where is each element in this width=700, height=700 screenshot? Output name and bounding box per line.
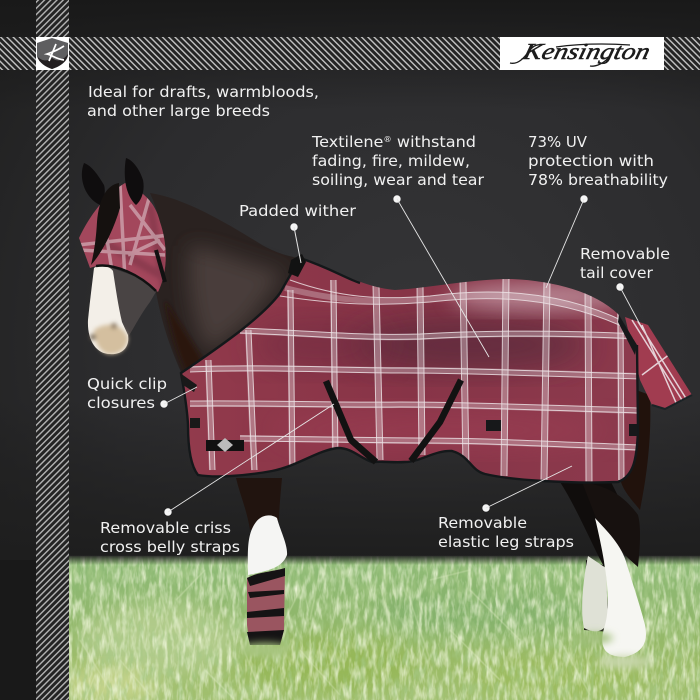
mane forelock — [91, 183, 120, 265]
callout: padded wither — [239, 202, 357, 263]
logo badge: K shield — [36, 37, 69, 70]
callout: leg straps — [438, 466, 574, 551]
callout: belly straps: cross belly straps — [100, 538, 240, 556]
callout: Textilene: ® — [383, 135, 392, 144]
callout: leg straps: Removable — [438, 514, 527, 532]
quick clips — [180, 373, 200, 428]
callout: belly straps — [100, 404, 334, 556]
callout: tail cover: Removable — [580, 245, 670, 263]
hind leg near — [582, 482, 640, 567]
logo: Kensington wordmark — [500, 37, 664, 70]
plaid vertical lines — [206, 278, 624, 482]
front leg — [236, 478, 282, 530]
white blaze — [88, 266, 128, 354]
callout: tail cover: tail cover — [580, 264, 654, 282]
velcro tabs — [486, 420, 637, 436]
callout: UV protection: protection with — [528, 152, 654, 170]
callout: Textilene: withstand — [392, 133, 476, 151]
callout: UV protection: 78% breathability — [528, 171, 668, 189]
callout: UV protection: 73% UV — [528, 133, 587, 151]
neck and chest — [150, 193, 303, 380]
muzzle — [90, 323, 128, 354]
horizontal striped band — [0, 37, 700, 70]
plaid vertical bands — [208, 278, 621, 482]
front leg white sock — [248, 515, 287, 575]
hind leg far white — [582, 556, 608, 631]
callout: ideal breeds: and other large breeds — [87, 102, 270, 120]
horse — [78, 158, 653, 668]
grass field — [60, 555, 700, 700]
blanket binding — [181, 258, 638, 483]
callout: quick clip closures — [87, 375, 197, 412]
callout: ideal breeds — [87, 83, 319, 120]
callout: Textilene: fading, fire, mildew, — [312, 152, 470, 170]
callout: ideal breeds: Ideal for drafts, warmbloods, — [88, 83, 319, 101]
head — [88, 262, 160, 354]
hind leg far — [560, 480, 620, 632]
vertical striped band — [36, 0, 69, 700]
plaid horizontal bands — [190, 288, 640, 448]
callout: padded wither: Padded wither — [239, 202, 357, 220]
callout: Textilene: Textilene — [312, 133, 380, 151]
logo: Kensington wordmark: Kensington — [519, 39, 653, 65]
belly straps — [326, 380, 461, 462]
plaid horizontal lines — [190, 280, 640, 450]
callout: quick clip closures: Quick clip — [87, 375, 167, 393]
callout: tail cover — [580, 245, 670, 330]
icon: ears — [82, 158, 144, 205]
blanket — [180, 254, 640, 483]
brand label — [206, 438, 244, 452]
callout: Textilene — [311, 133, 489, 357]
callout: leg straps: elastic leg straps — [438, 533, 574, 551]
callout: quick clip closures: closures — [87, 394, 155, 412]
tail cover flap — [625, 317, 692, 409]
icon: tail — [620, 385, 650, 510]
shading — [350, 319, 590, 371]
callout: Textilene: soiling, wear and tear — [312, 171, 485, 189]
hind leg near white — [595, 518, 646, 657]
callout: UV protection — [528, 133, 668, 288]
grass over hooves — [239, 633, 653, 668]
callout: belly straps: Removable criss — [100, 519, 231, 537]
leg boot — [247, 568, 285, 645]
fly mask — [78, 183, 170, 292]
tail strap edge — [618, 315, 637, 355]
padded wither — [288, 254, 306, 277]
